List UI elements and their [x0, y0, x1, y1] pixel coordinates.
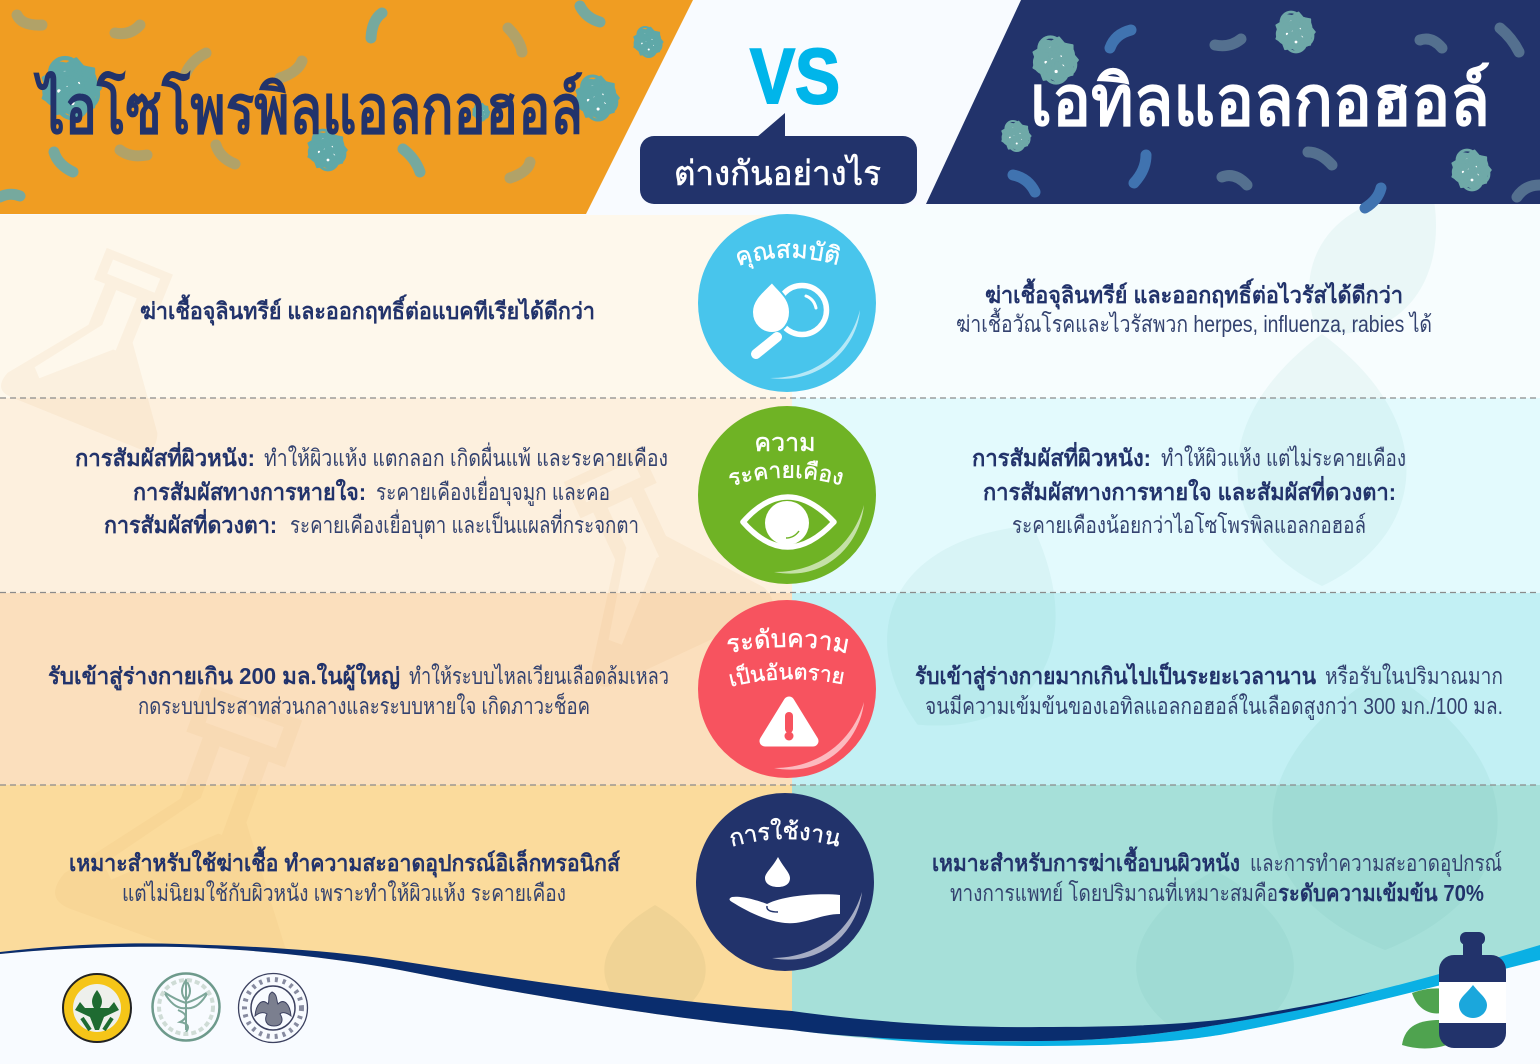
text: row 1 left: ฆ่าเชื้อจุลินทรีย์ และออกฤทธิ์ต่อแบคทีเรียได้ดีกว่า	[140, 294, 595, 326]
circle: irritation	[698, 406, 876, 584]
text: row 1 right: ฆ่าเชื้อวัณโรคและไวรัสพวก herpes, influenza, rabies ได้	[956, 308, 1432, 337]
footer: wave	[0, 943, 1540, 1064]
text: row 3 left	[48, 662, 669, 719]
text: row 4 right: เหมาะสำหรับการฆ่าเชื้อบนผิวหนัง	[932, 846, 1240, 876]
circle: danger level	[698, 600, 876, 778]
text: row 1 right: ฆ่าเชื้อจุลินทรีย์ และออกฤทธิ์ต่อไวรัสได้ดีกว่า	[985, 278, 1403, 310]
circle: irritation: ระคายเคือง	[729, 460, 843, 485]
text: row 2 right	[972, 441, 1406, 538]
callout: how they differ	[640, 113, 917, 204]
text: row 3 right: หรือรับในปริมาณมาก	[1325, 663, 1503, 689]
text: row 2 left: การสัมผัสทางการหายใจ:	[133, 478, 366, 505]
title: ethyl alcohol: เอทิลแอลกอฮอล์	[1030, 62, 1490, 140]
circle: danger level: ระดับความ	[728, 627, 848, 654]
text: row 4 right: ระดับความเข้มข้น 70%	[1278, 880, 1484, 906]
text: row 3 left: รับเข้าสู่ร่างกายเกิน 200 มล.ในผู้ใหญ่	[48, 662, 400, 691]
circle: properties: คุณสมบัติ	[737, 240, 840, 269]
text: row 2 left: การสัมผัสที่ดวงตา:	[104, 508, 277, 538]
text: row 3 left: ทำให้ระบบไหลเวียนเลือดล้มเหลว	[409, 663, 669, 689]
icon: hand with drop	[730, 857, 840, 923]
VS heading: VS	[750, 32, 840, 120]
text: row 4 left: เหมาะสำหรับใช้ฆ่าเชื้อ ทำความสะอาดอุปกรณ์อิเล็กทรอนิกส์	[69, 846, 621, 878]
circle: danger level: เป็นอันตราย	[729, 662, 844, 686]
row dividers	[0, 398, 1540, 785]
text: row 4 right: ทางการแพทย์ โดยปริมาณที่เหมาะสมคือ	[950, 877, 1278, 906]
text: row 2 right: ระคายเคืองน้อยกว่าไอโซโพรพิลแอลกอฮอล์	[1012, 512, 1366, 538]
callout: how they differ: ต่างกันอย่างไร	[674, 154, 881, 193]
logo: Excise Department	[238, 974, 308, 1042]
text: row 4 left: แต่ไม่นิยมใช้กับผิวหนัง เพราะทำให้ผิวแห้ง ระคายเคือง	[122, 880, 566, 906]
text: row 3 right	[915, 661, 1503, 720]
text: row 2 left: ระคายเคืองเยื่อบุจมูก และคอ	[376, 476, 610, 506]
icon: warning	[765, 702, 813, 741]
icon: magnifier with drop	[752, 282, 826, 354]
logo: Department of Medical Sciences	[63, 974, 131, 1042]
icon: eye	[743, 497, 834, 547]
circle: irritation: ความ	[754, 429, 816, 457]
text: row 2 right: การสัมผัสทางการหายใจ และสัมผัสที่ดวงตา:	[983, 475, 1396, 505]
text: row 2 left: ระคายเคืองเยื่อบุตา และเป็นแผลที่กระจกตา	[290, 509, 639, 539]
logo: pharmaceutical organization	[152, 974, 220, 1040]
text: row 3 right: รับเข้าสู่ร่างกายมากเกินไปเป็นระยะเวลานาน	[915, 661, 1316, 691]
text: row 2 left	[75, 441, 668, 539]
text: row 2 left: การสัมผัสที่ผิวหนัง:	[75, 441, 255, 471]
title: isopropyl alcohol: ไอโซโพรพิลแอลกอฮอล์	[33, 70, 583, 148]
text: row 3 left: กดระบบประสาทส่วนกลางและระบบหายใจ เกิดภาวะช็อค	[138, 691, 590, 719]
icon: bottle	[1439, 932, 1506, 1048]
circle: properties	[698, 214, 876, 392]
text: row 2 right: การสัมผัสที่ผิวหนัง:	[972, 441, 1151, 471]
text: row 4 right	[932, 846, 1502, 906]
header: orange isopropyl banner	[0, 0, 693, 214]
circle: usage: การใช้งาน	[730, 818, 840, 846]
circle: usage	[696, 793, 874, 971]
text: row 1 right	[956, 278, 1432, 337]
text: row 2 left: ทำให้ผิวแห้ง แตกลอก เกิดผื่นแพ้ และระคายเคือง	[264, 442, 668, 471]
text: row 2 right: ทำให้ผิวแห้ง แต่ไม่ระคายเคือง	[1161, 445, 1406, 471]
text: row 4 left	[69, 846, 621, 906]
icon: leaves behind bottle	[1402, 988, 1450, 1048]
header: navy ethyl banner	[926, 0, 1540, 208]
